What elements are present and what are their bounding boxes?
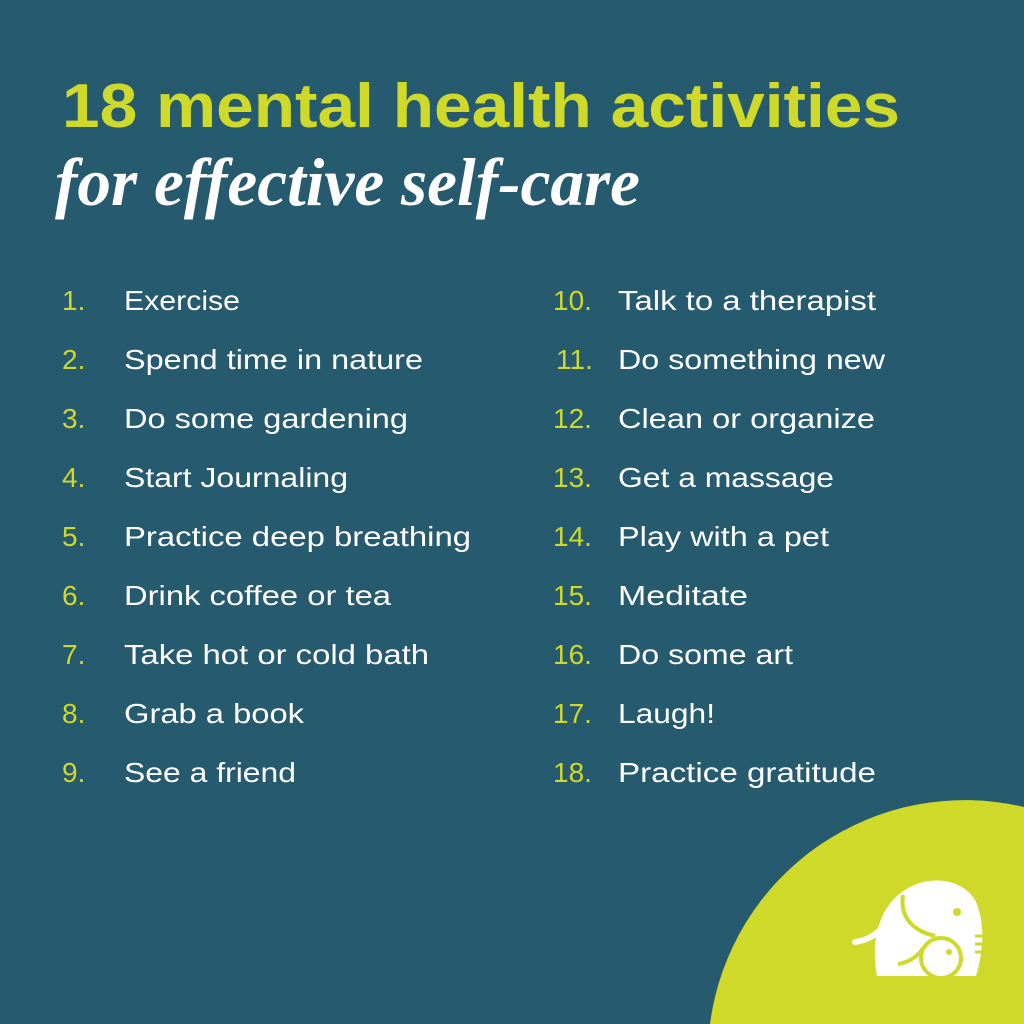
list: column 1: Grab a book bbox=[124, 698, 305, 729]
list: column 2: Laugh! bbox=[618, 698, 715, 729]
list: column 2: Do some art bbox=[618, 639, 793, 670]
list: column 2: Meditate bbox=[618, 580, 748, 611]
decorative circle: bottom right bbox=[710, 800, 1024, 1024]
list: column 1: Do some gardening bbox=[124, 403, 408, 434]
icon: elephant logo bbox=[855, 881, 987, 978]
list: column 1: Spend time in nature bbox=[124, 344, 423, 375]
list: column 1: 8. bbox=[62, 698, 85, 729]
list: column 1: Exercise bbox=[124, 285, 240, 316]
list: column 1: 4. bbox=[62, 462, 85, 493]
list: column 2: 12. bbox=[553, 403, 592, 434]
list: column 2: Talk to a therapist bbox=[618, 285, 876, 316]
list: column 2: 10. bbox=[553, 285, 592, 316]
subtitle: for effective self-care bbox=[55, 144, 640, 220]
list: column 1: 3. bbox=[62, 403, 85, 434]
list: column 2: Get a massage bbox=[618, 462, 834, 493]
list: column 1: 5. bbox=[62, 521, 85, 552]
list: column 2: 14. bbox=[553, 521, 592, 552]
title: 18 mental health activities bbox=[62, 72, 900, 141]
list: column 1: 9. bbox=[62, 757, 85, 788]
list: column 1: 6. bbox=[62, 580, 85, 611]
list: column 1: Take hot or cold bath bbox=[124, 639, 429, 670]
list: column 1: See a friend bbox=[124, 757, 296, 788]
list: column 1: 1. bbox=[62, 285, 85, 316]
list: column 1: Start Journaling bbox=[124, 462, 348, 493]
list: column 2: Play with a pet bbox=[618, 521, 829, 552]
list: column 1: 2. bbox=[62, 344, 85, 375]
list: column 2: Practice gratitude bbox=[618, 757, 876, 788]
list: column 1: 7. bbox=[62, 639, 85, 670]
list: column 2: 13. bbox=[553, 462, 592, 493]
list: column 2: Do something new bbox=[618, 344, 886, 375]
list: column 1: Practice deep breathing bbox=[124, 521, 471, 552]
list: column 2 bbox=[553, 285, 886, 788]
list: column 2: 17. bbox=[553, 698, 592, 729]
list: column 1 bbox=[62, 285, 471, 788]
list: column 2: Clean or organize bbox=[618, 403, 875, 434]
list: column 2: 11. bbox=[556, 344, 593, 375]
list: column 1: Drink coffee or tea bbox=[124, 580, 392, 611]
list: column 2: 18. bbox=[553, 757, 592, 788]
list: column 2: 15. bbox=[553, 580, 592, 611]
list: column 2: 16. bbox=[553, 639, 592, 670]
